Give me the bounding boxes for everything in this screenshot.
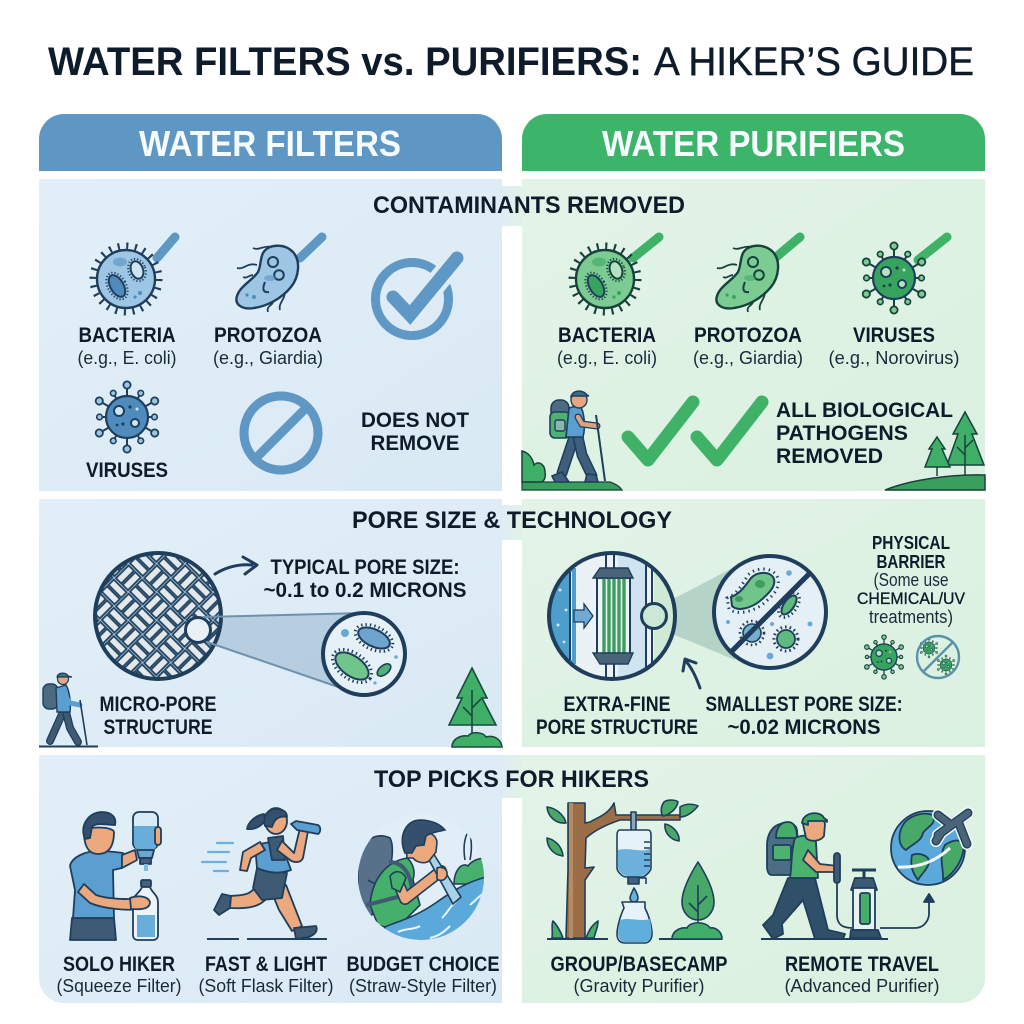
label: micro-pore structure: MICRO-PORE [100, 693, 216, 716]
icon: bacteria with check [93, 237, 175, 312]
icon: virus with check [861, 237, 947, 314]
panel: filters top picks [39, 755, 502, 1003]
label: bacteria: (e.g., E. coli) [78, 348, 176, 368]
icon: bacteria with check [572, 237, 659, 312]
label: viruses: (e.g., Norovirus) [828, 348, 960, 368]
diagram: magnified filter barrier [714, 556, 826, 668]
panel: purifiers top picks [522, 755, 985, 1003]
section heading: contaminants removed: CONTAMINANTS REMOVED [373, 192, 685, 219]
label: all biological pathogens removed: ALL BIOLOGICAL [776, 399, 953, 422]
label: all biological pathogens removed: PATHOGENS [776, 422, 908, 445]
label: protozoa: PROTOZOA [694, 324, 802, 347]
label: solo hiker: SOLO HIKER [63, 953, 175, 976]
panel: filters pore size [39, 499, 502, 747]
illustration: runner with soft flask [202, 808, 327, 939]
label: budget choice: (Straw-Style Filter) [349, 976, 497, 996]
label: smallest pore size: ~0.02 MICRONS [728, 716, 880, 739]
icon: double check marks [628, 402, 762, 460]
label: viruses [828, 324, 960, 368]
label: solo hiker [56, 953, 182, 996]
label: micro-pore structure [100, 693, 216, 739]
label: solo hiker: (Squeeze Filter) [56, 976, 182, 996]
label: does not remove: DOES NOT [361, 409, 469, 432]
label: typical pore size: TYPICAL PORE SIZE: [270, 556, 460, 579]
label: budget choice [346, 953, 500, 996]
header: water filters [39, 114, 502, 171]
label: group basecamp [550, 953, 728, 996]
label: protozoa: PROTOZOA [214, 324, 322, 347]
title: WATER FILTERS vs. PURIFIERS: [48, 40, 642, 84]
illustration: tree and bush [449, 668, 502, 747]
label: fast and light: FAST & LIGHT [205, 953, 327, 976]
title: A HIKER’S GUIDE [654, 40, 974, 84]
label: extra-fine pore structure: PORE STRUCTURE [536, 716, 698, 739]
label: group basecamp: (Gravity Purifier) [574, 976, 704, 996]
label: viruses: VIRUSES [853, 324, 935, 347]
illustration: gravity purifier on tree [547, 800, 722, 943]
diagram: micro-pore weave circle [95, 553, 363, 690]
label: protozoa [213, 324, 323, 368]
icon: virus [94, 381, 160, 453]
label: physical barrier note: treatments) [869, 607, 953, 627]
label: all biological pathogens removed [776, 399, 953, 468]
icon: crossed-out viruses [917, 636, 959, 678]
section heading: top picks for hikers [374, 755, 649, 798]
icon: prohibited sign [244, 396, 318, 470]
label: does not remove: REMOVE [370, 432, 460, 455]
label: remote travel: REMOTE TRAVEL [785, 953, 939, 976]
icon: small virus [864, 635, 904, 679]
section heading: contaminants removed [373, 186, 685, 226]
panel: purifiers pore size [522, 499, 985, 747]
header: water purifiers: WATER PURIFIERS [602, 123, 905, 164]
illustration: hiker on hill [522, 391, 622, 490]
label: extra-fine pore structure: EXTRA-FINE [564, 693, 670, 716]
header: water filters: WATER FILTERS [139, 123, 401, 164]
label: does not remove [361, 409, 469, 455]
illustration: small hiker [39, 673, 98, 746]
icon: protozoa with check [236, 237, 322, 312]
arrow: to smallest pore [683, 659, 700, 688]
label: physical barrier note: BARRIER [876, 552, 946, 572]
label: bacteria: BACTERIA [78, 324, 176, 347]
diagram: magnified bacteria [323, 613, 405, 695]
label: bacteria [557, 324, 657, 368]
label: bacteria: (e.g., E. coli) [557, 348, 657, 368]
label: viruses: VIRUSES [86, 459, 168, 482]
section heading: pore size and technology: PORE SIZE & TECHNOLOGY [352, 507, 672, 534]
label: physical barrier note: (Some use [874, 570, 948, 590]
illustration: trees on hill [885, 412, 985, 490]
label: typical pore size: ~0.1 to 0.2 MICRONS [264, 579, 466, 602]
illustration: solo hiker with squeeze filter [70, 812, 161, 940]
header: water purifiers [522, 114, 985, 171]
label: typical pore size [264, 556, 466, 602]
label: protozoa: (e.g., Giardia) [213, 348, 323, 368]
label: bacteria [78, 324, 176, 368]
label: physical barrier note [857, 533, 966, 627]
label: remote travel: (Advanced Purifier) [784, 976, 940, 996]
label: fast and light [198, 953, 334, 996]
label: budget choice: BUDGET CHOICE [346, 953, 500, 976]
label: extra-fine pore structure [536, 693, 698, 739]
label: smallest pore size [706, 693, 902, 739]
label: bacteria: BACTERIA [558, 324, 656, 347]
label: protozoa [693, 324, 803, 368]
label: all biological pathogens removed: REMOVED [776, 445, 883, 468]
label: protozoa: (e.g., Giardia) [693, 348, 803, 368]
label: physical barrier note: PHYSICAL [872, 533, 950, 553]
illustration: hiker with pump [761, 811, 968, 939]
arrow: to pore size [215, 557, 257, 574]
label: fast and light: (Soft Flask Filter) [198, 976, 334, 996]
section heading: top picks for hikers: TOP PICKS FOR HIKERS [374, 766, 649, 793]
panel: filters contaminants [39, 179, 502, 491]
diagram: extra-fine pore cross section [549, 553, 742, 680]
label: remote travel [784, 953, 940, 996]
icon: protozoa with check [716, 237, 800, 312]
icon: check in circle [376, 258, 457, 336]
illustration: hiker with straw filter [358, 819, 484, 940]
label: smallest pore size: SMALLEST PORE SIZE: [706, 693, 902, 716]
label: physical barrier note: CHEMICAL/UV [857, 589, 966, 608]
panel: purifiers contaminants [522, 179, 985, 491]
title [48, 40, 974, 84]
label: micro-pore structure: STRUCTURE [104, 716, 212, 739]
label: group basecamp: GROUP/BASECAMP [550, 953, 728, 976]
